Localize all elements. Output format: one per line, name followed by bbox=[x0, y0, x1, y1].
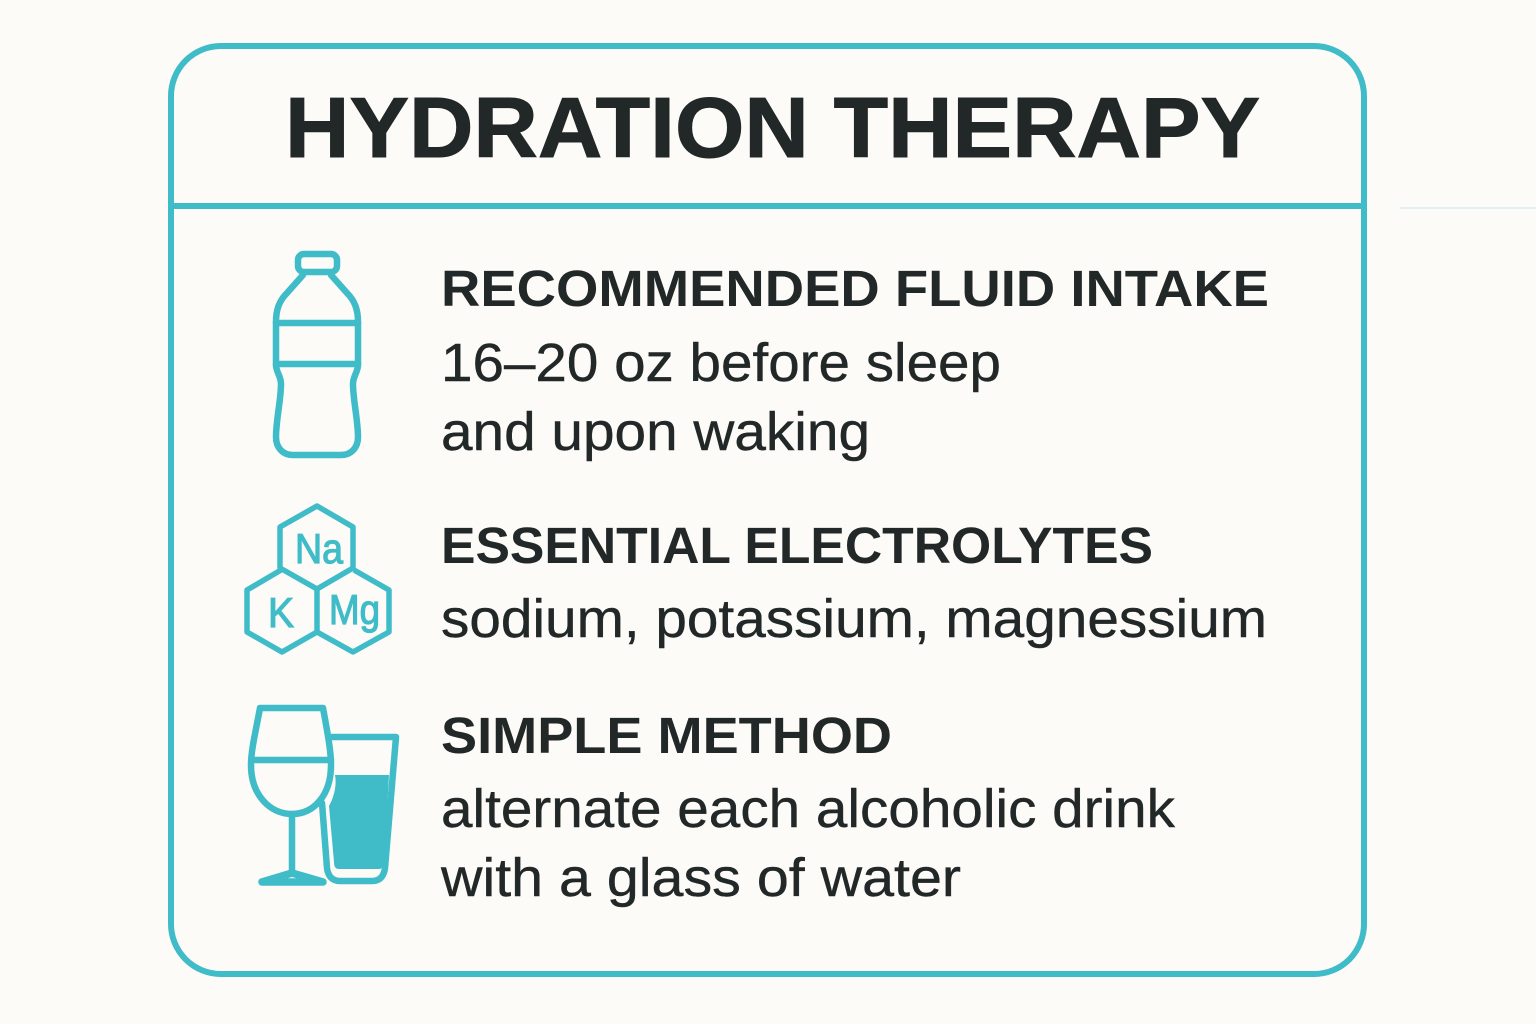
heading: essential electrolytes: ESSENTIAL ELECTROLYTES bbox=[441, 517, 1153, 574]
text: intake line two: and upon waking bbox=[441, 402, 870, 462]
section: recommended fluid intake bbox=[441, 260, 1269, 462]
icon: electrolyte hexagons: K bbox=[268, 589, 294, 636]
heading: recommended fluid intake: RECOMMENDED FLUID INTAKE bbox=[441, 260, 1269, 317]
text: method line one: alternate each alcoholic drink bbox=[441, 779, 1176, 839]
icon: wine glass and water glass bbox=[251, 708, 396, 882]
heading: simple method: SIMPLE METHOD bbox=[441, 707, 892, 764]
icon: water bottle bbox=[276, 254, 358, 455]
icon: electrolyte hexagons: Na bbox=[295, 525, 344, 572]
section: simple method bbox=[440, 707, 1176, 908]
section: essential electrolytes bbox=[441, 517, 1267, 649]
title: HYDRATION THERAPY bbox=[285, 81, 1260, 176]
text: intake line one: 16–20 oz before sleep bbox=[441, 333, 1001, 393]
icon: electrolyte hexagons bbox=[247, 506, 389, 652]
text: method line two: with a glass of water bbox=[440, 848, 961, 908]
text: electrolyte list: sodium, potassium, magnessium bbox=[441, 589, 1267, 649]
icon: electrolyte hexagons: Mg bbox=[329, 586, 380, 633]
